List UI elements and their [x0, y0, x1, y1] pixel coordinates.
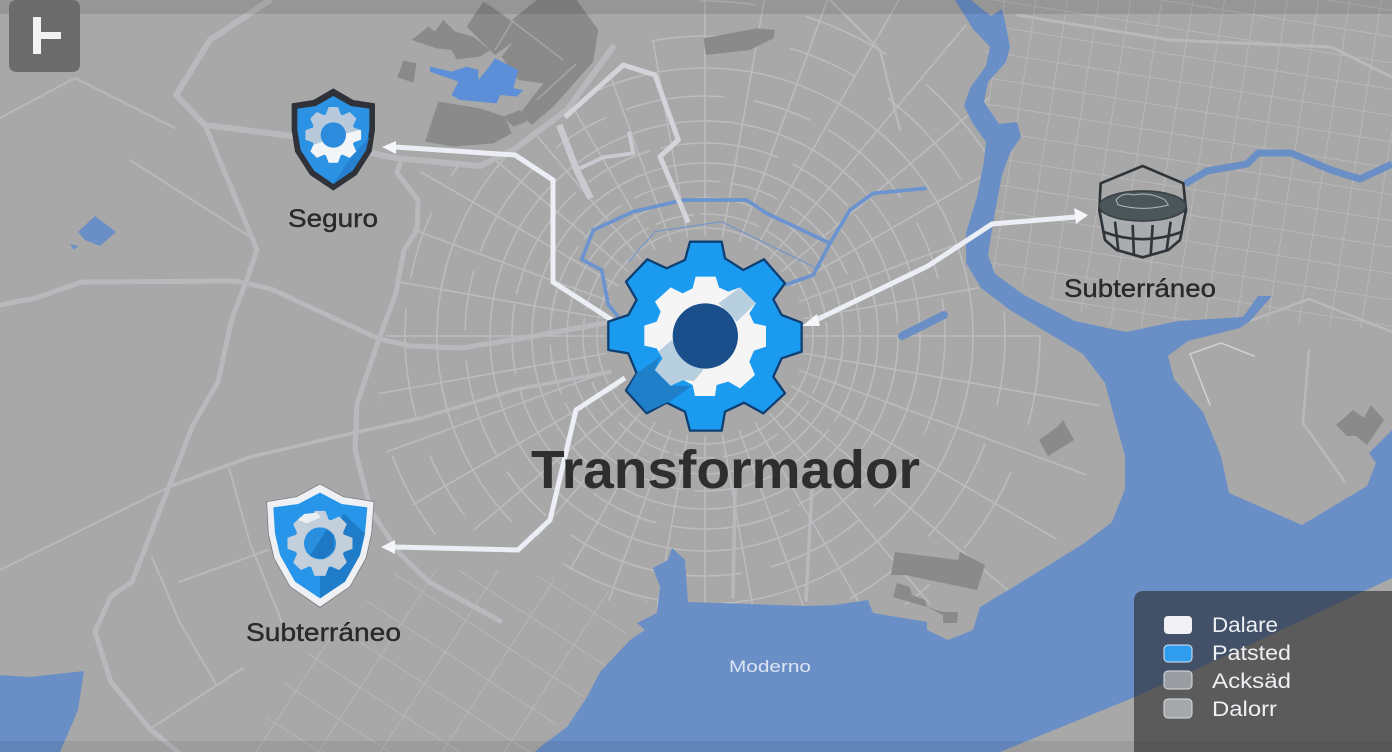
legend item: Dalorr: Dalorr — [1212, 698, 1277, 721]
title: Transformador — [531, 440, 920, 500]
icon: white shield with gear — [267, 484, 374, 607]
label: Seguro: Seguro — [288, 205, 378, 233]
icon: dark shield with gear — [292, 88, 375, 191]
top shade band — [0, 0, 1392, 14]
legend item: Acksäd — [1164, 670, 1291, 693]
legend item: Dalare: Dalare — [1212, 614, 1278, 637]
logo badge — [9, 0, 80, 72]
arrow: gear to Seguro — [382, 141, 612, 320]
arrow: Subterráneo to gear — [802, 208, 1088, 326]
icon: underground vault basket — [1099, 166, 1186, 257]
legend item: Dalare — [1164, 614, 1278, 637]
arrow: gear to lower Subterráneo — [381, 378, 625, 554]
label: lower Subterráneo: Subterráneo — [246, 619, 401, 647]
legend item: Dalorr — [1164, 698, 1277, 721]
label: Moderno: Moderno — [729, 657, 811, 676]
blue route lines around the gear — [582, 188, 927, 317]
legend item: Acksäd: Acksäd — [1212, 670, 1291, 693]
legend panel — [1134, 591, 1392, 752]
legend item: Patsted — [1164, 642, 1291, 665]
legend item: Patsted: Patsted — [1212, 642, 1291, 665]
light street loop north of the gear — [559, 65, 688, 223]
central gear icon — [608, 242, 802, 431]
label: right Subterráneo: Subterráneo — [1064, 275, 1216, 303]
